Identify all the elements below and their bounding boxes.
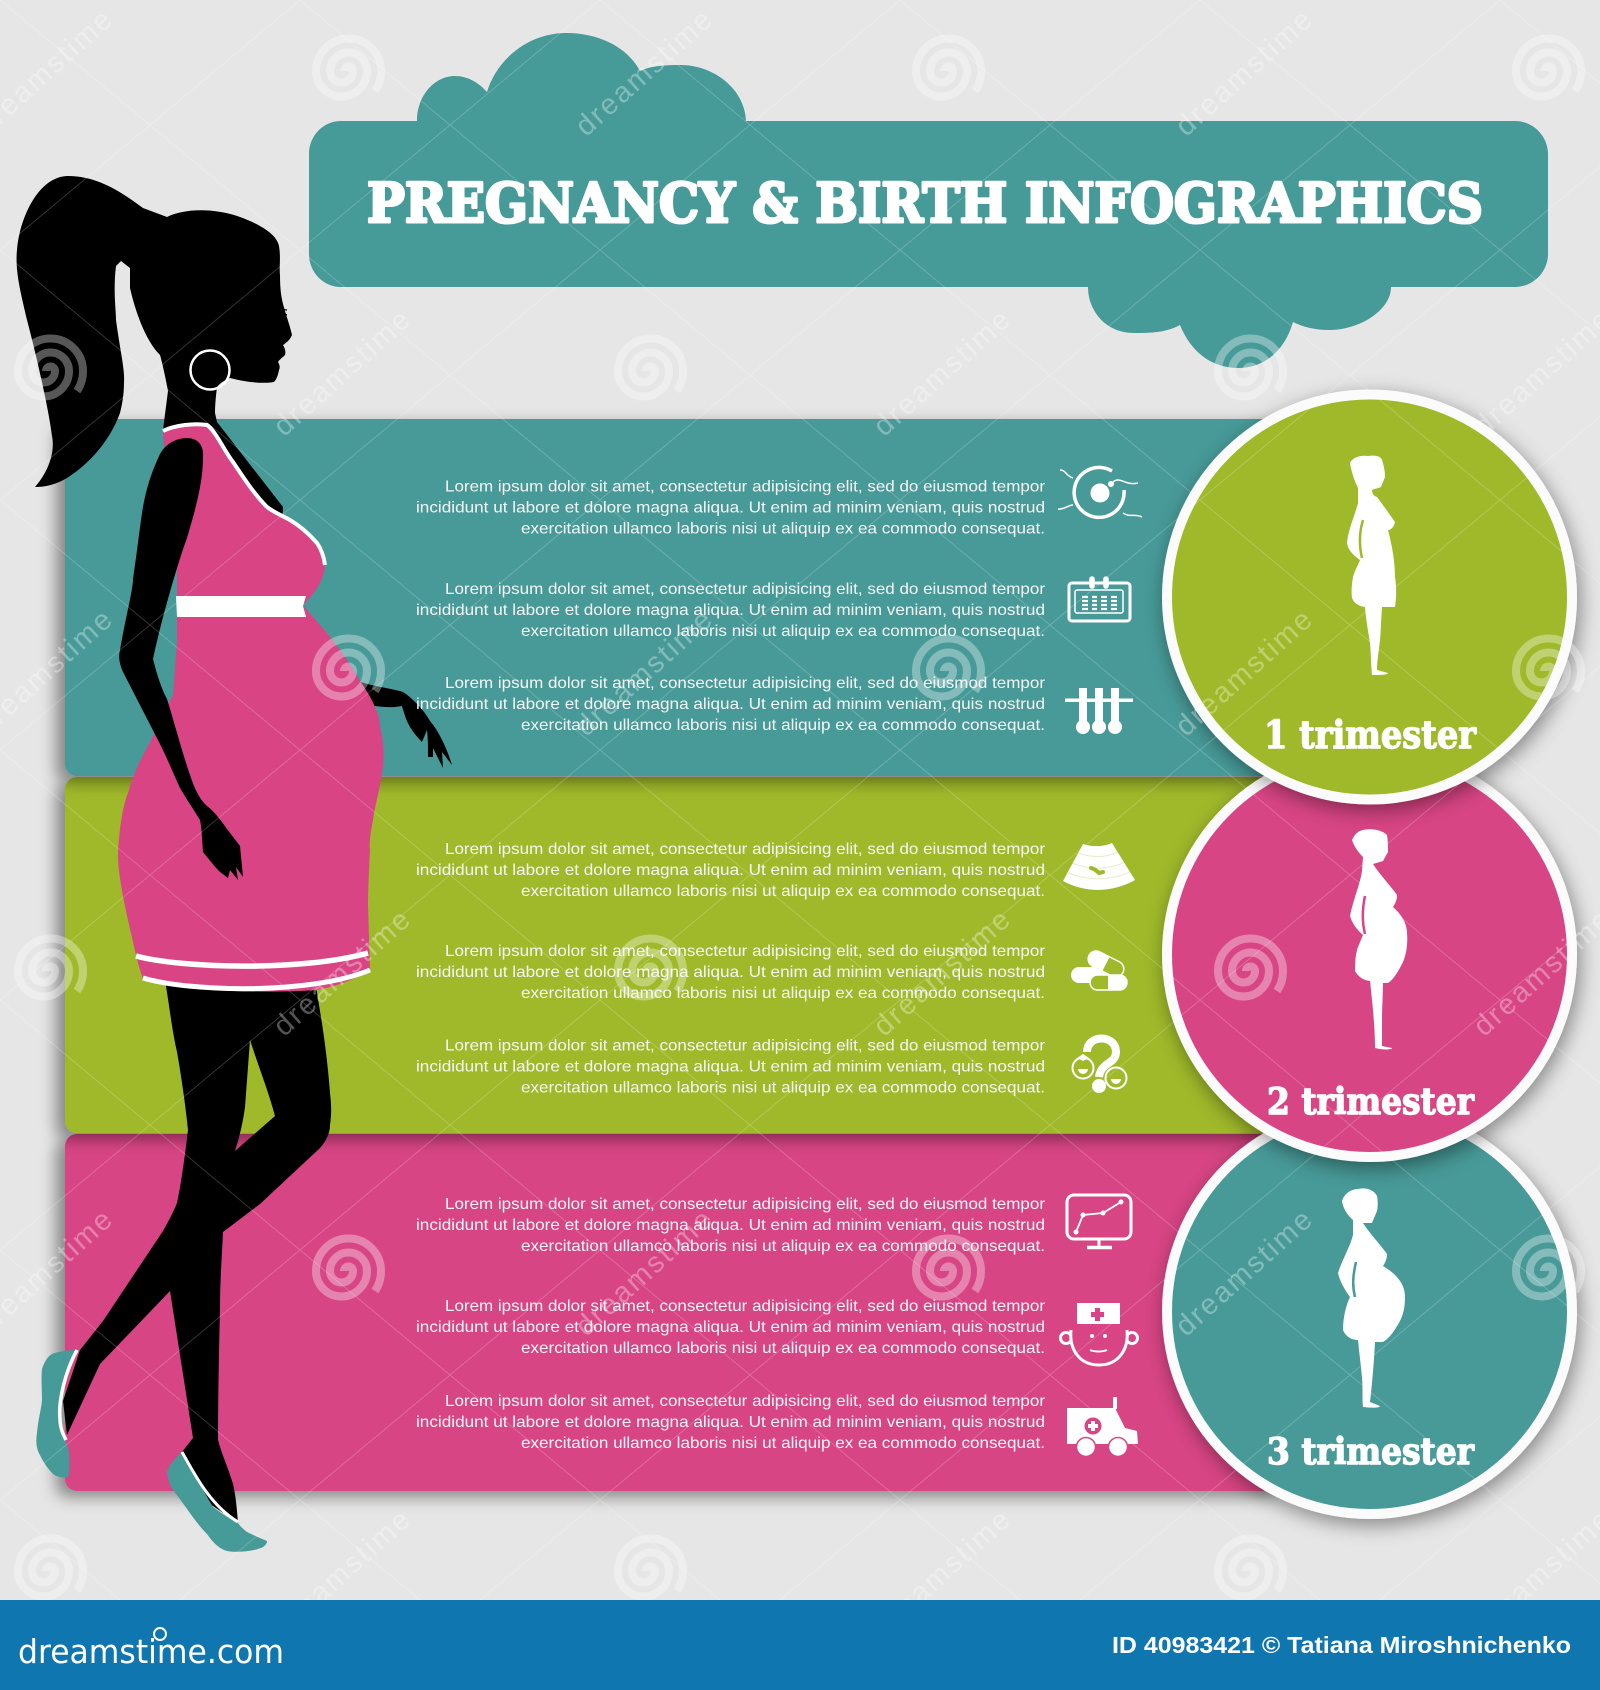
text block 6 (416, 1038, 1046, 1096)
text block 5: exercitation ullamco laboris nisi ut aliquip ex ea commodo consequat. (521, 985, 1045, 1002)
circle disc (1167, 1109, 1572, 1514)
watermark overlay: dreamstime (1169, 1204, 1319, 1343)
icon: calendar (1069, 579, 1130, 621)
watermark overlay: dreamstime (569, 604, 719, 743)
silhouette arm gap (1353, 1262, 1356, 1297)
text block 2: exercitation ullamco laboris nisi ut aliquip ex ea commodo consequat. (521, 623, 1045, 640)
circle disc (1167, 752, 1572, 1157)
footer bar (0, 1600, 1600, 1690)
title text: PREGNANCY & BIRTH INFOGRAPHICS (367, 171, 1483, 235)
text block 7: exercitation ullamco laboris nisi ut aliquip ex ea commodo consequat. (521, 1238, 1045, 1255)
text block 8: exercitation ullamco laboris nisi ut aliquip ex ea commodo consequat. (521, 1340, 1045, 1357)
text block 4: incididunt ut labore et dolore magna aliqua. Ut enim ad minim veniam, quis nostrud (416, 862, 1045, 879)
text block 6: Lorem ipsum dolor sit amet, consectetur adipisicing elit, sed do eiusmod tempor (445, 1038, 1046, 1054)
text block 8: Lorem ipsum dolor sit amet, consectetur adipisicing elit, sed do eiusmod tempor (445, 1298, 1046, 1315)
icon: egg and sperm (1058, 467, 1142, 517)
text block 7 (416, 1196, 1046, 1255)
dress neckline trim (163, 424, 325, 565)
circle: second trimester (1167, 752, 1572, 1157)
text block 5: Lorem ipsum dolor sit amet, consectetur adipisicing elit, sed do eiusmod tempor (445, 943, 1046, 960)
icon: test tubes (1065, 688, 1133, 734)
back shoe (36, 1350, 78, 1477)
text block 6: exercitation ullamco laboris nisi ut aliquip ex ea commodo consequat. (521, 1080, 1045, 1096)
text block 6: incididunt ut labore et dolore magna aliqua. Ut enim ad minim veniam, quis nostrud (416, 1058, 1045, 1076)
watermark overlay: dreamstime (867, 1504, 1017, 1643)
earring (190, 350, 230, 390)
icon: question mark and babies (1072, 1038, 1126, 1093)
watermark overlay: dreamstime (867, 904, 1017, 1043)
label 1 trimester: 1 trimester (1264, 712, 1477, 757)
silhouette second trimester (1350, 829, 1407, 1050)
watermark overlay: dreamstime (569, 1204, 719, 1343)
icon: monitor chart (1067, 1195, 1131, 1248)
text block 1 (416, 478, 1046, 538)
pregnant woman silhouette (17, 176, 452, 1552)
footer logo spiral (154, 1628, 166, 1640)
dress hem stripes (136, 953, 368, 966)
right hand (355, 680, 452, 768)
icon: pills (1071, 948, 1127, 990)
text block 8: incididunt ut labore et dolore magna aliqua. Ut enim ad minim veniam, quis nostrud (416, 1319, 1045, 1336)
text block 1: exercitation ullamco laboris nisi ut aliquip ex ea commodo consequat. (521, 520, 1045, 538)
banner cloud shape (309, 33, 1548, 368)
silhouette third trimester (1338, 1188, 1405, 1408)
silhouette arm gap (1360, 520, 1363, 558)
watermark overlay: dreamstime (267, 904, 417, 1043)
text block 3: Lorem ipsum dolor sit amet, consectetur adipisicing elit, sed do eiusmod tempor (445, 675, 1046, 692)
text block 2 (416, 581, 1046, 640)
band: second trimester green (65, 777, 1285, 1133)
watermark overlay: dreamstime (1169, 604, 1319, 743)
hair head and neck (17, 176, 292, 600)
text block 4: Lorem ipsum dolor sit amet, consectetur adipisicing elit, sed do eiusmod tempor (445, 841, 1046, 858)
text block 4 (416, 841, 1046, 900)
eyelash (278, 309, 287, 315)
dress waist band (176, 596, 306, 617)
text block 3: incididunt ut labore et dolore magna aliqua. Ut enim ad minim veniam, quis nostrud (416, 696, 1045, 713)
text block 3 (416, 675, 1046, 734)
watermark overlay: dreamstime (1169, 4, 1319, 143)
band: third trimester pink (65, 1134, 1285, 1491)
text block 1: Lorem ipsum dolor sit amet, consectetur adipisicing elit, sed do eiusmod tempor (445, 478, 1046, 496)
text block 9: exercitation ullamco laboris nisi ut aliquip ex ea commodo consequat. (521, 1435, 1045, 1452)
footer logo: dreamstime.com (18, 1632, 284, 1671)
text block 5: incididunt ut labore et dolore magna aliqua. Ut enim ad minim veniam, quis nostrud (416, 964, 1045, 981)
front shoe (167, 1452, 267, 1552)
icon: nurse (1060, 1303, 1138, 1367)
text block 7: incididunt ut labore et dolore magna aliqua. Ut enim ad minim veniam, quis nostrud (416, 1217, 1045, 1234)
text block 1: incididunt ut labore et dolore magna aliqua. Ut enim ad minim veniam, quis nostrud (416, 500, 1045, 516)
text block 9: incididunt ut labore et dolore magna aliqua. Ut enim ad minim veniam, quis nostrud (416, 1414, 1045, 1431)
watermark overlay: dreamstime (867, 304, 1017, 443)
watermark overlay: dreamstime (267, 304, 417, 443)
text block 7: Lorem ipsum dolor sit amet, consectetur adipisicing elit, sed do eiusmod tempor (445, 1196, 1046, 1213)
icon: ultrasound (1063, 843, 1135, 890)
watermark overlay: dreamstime (569, 4, 719, 143)
circle disc (1167, 394, 1572, 800)
silhouette arm gap (1363, 896, 1365, 934)
text block 9 (416, 1393, 1046, 1452)
text block 4: exercitation ullamco laboris nisi ut aliquip ex ea commodo consequat. (521, 883, 1045, 900)
silhouette first trimester (1347, 456, 1396, 675)
band: first trimester teal (65, 419, 1285, 776)
text block 3: exercitation ullamco laboris nisi ut aliquip ex ea commodo consequat. (521, 717, 1045, 734)
icon: ambulance (1067, 1397, 1138, 1456)
legs (63, 980, 331, 1523)
text block 2: Lorem ipsum dolor sit amet, consectetur adipisicing elit, sed do eiusmod tempor (445, 581, 1046, 598)
text block 5 (416, 943, 1046, 1002)
watermark overlay: dreamstime (267, 1504, 417, 1643)
text block 2: incididunt ut labore et dolore magna aliqua. Ut enim ad minim veniam, quis nostrud (416, 602, 1045, 619)
text block 9: Lorem ipsum dolor sit amet, consectetur adipisicing elit, sed do eiusmod tempor (445, 1393, 1046, 1410)
circle: first trimester (1167, 394, 1572, 800)
label 2 trimester: 2 trimester (1267, 1081, 1475, 1123)
label 3 trimester: 3 trimester (1267, 1431, 1475, 1473)
footer credit: ID 40983421 © Tatiana Miroshnichenko (1112, 1632, 1571, 1658)
text block 8 (416, 1298, 1046, 1357)
left arm (119, 438, 243, 880)
dress (118, 424, 384, 992)
circle: third trimester (1167, 1109, 1572, 1514)
title banner (309, 33, 1548, 368)
